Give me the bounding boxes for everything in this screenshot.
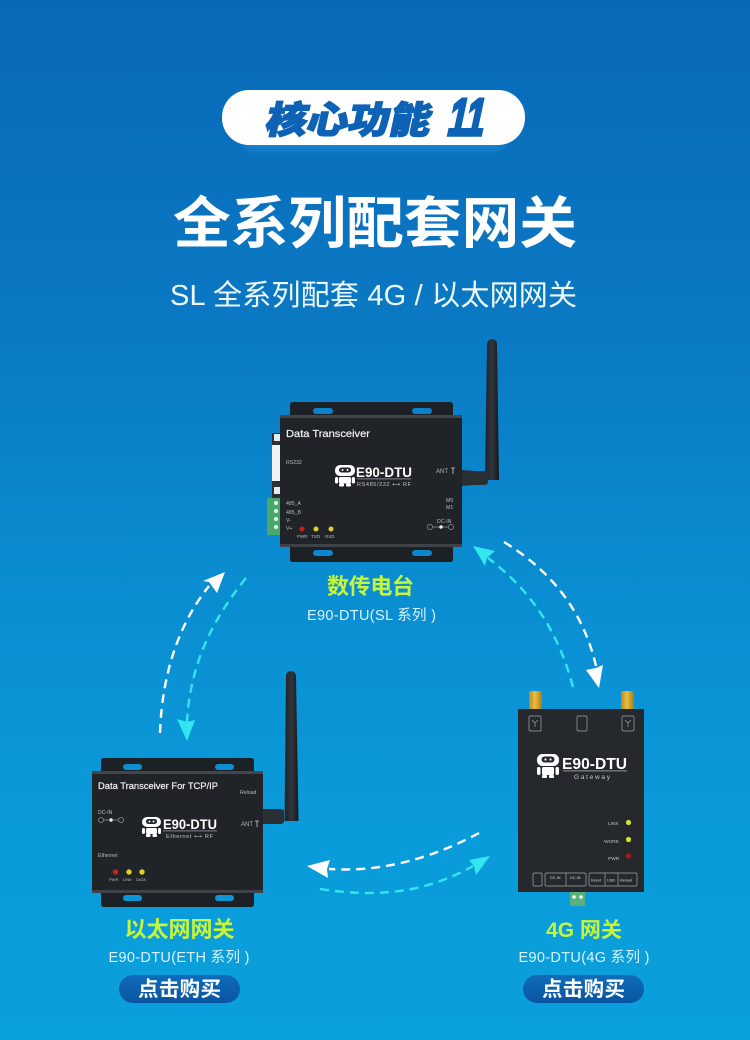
device: 4G gateway: DC-IN bbox=[550, 876, 561, 880]
body bbox=[518, 709, 644, 892]
device: ethernet gateway bbox=[92, 671, 298, 907]
model label: E90-DTU bbox=[356, 464, 412, 480]
antenna connectors bbox=[529, 691, 634, 710]
port labels: PWR bbox=[297, 534, 308, 539]
antenna symbol bbox=[255, 821, 259, 827]
icon: robot bbox=[335, 465, 355, 486]
port icons top bbox=[529, 716, 634, 731]
status labels and LEDs: LINK bbox=[608, 821, 619, 827]
DC jack symbol bbox=[427, 524, 454, 530]
badge: core function 11: 11 bbox=[443, 89, 492, 147]
title: 全系列配套网关 bbox=[173, 192, 577, 255]
port labels: Reload bbox=[240, 790, 257, 796]
port labels: DATA bbox=[136, 877, 146, 882]
port labels: Ethernet bbox=[98, 853, 118, 859]
button: buy 4G bbox=[523, 975, 644, 1003]
device: data transceiver SL bbox=[267, 339, 499, 562]
device label: 4G gateway bbox=[518, 919, 650, 966]
port labels: V+ bbox=[286, 526, 292, 532]
device label: 4G gateway: E90-DTU(4G 系列 ) bbox=[518, 949, 650, 966]
antenna symbol bbox=[451, 468, 455, 474]
device label: ethernet gateway: 以太网网关 bbox=[124, 917, 234, 942]
port labels: LINK bbox=[123, 877, 132, 882]
heading on device: Data Transceiver bbox=[286, 429, 371, 440]
flanges bbox=[101, 758, 254, 771]
device: 4G gateway: Reload bbox=[620, 878, 632, 882]
device: ethernet gateway: Ethernet ⟷ RF bbox=[166, 834, 214, 840]
device label: ethernet gateway: E90-DTU(ETH 系列 ) bbox=[108, 949, 250, 966]
device label: radio: E90-DTU(SL 系列 ) bbox=[307, 607, 436, 624]
badge: core function 11: 核心功能 bbox=[262, 99, 436, 141]
arrows: right pair bbox=[473, 542, 603, 688]
port labels: ANT bbox=[241, 822, 253, 828]
LEDs bbox=[300, 526, 304, 532]
device: 4G gateway: USB bbox=[607, 878, 615, 882]
heading on device: Data Transceiver For TCP/IP bbox=[98, 781, 218, 792]
icon: robot bbox=[537, 754, 559, 778]
port labels bbox=[286, 460, 453, 539]
device: 4G gateway: Reset bbox=[591, 878, 602, 882]
port labels: RXD bbox=[325, 534, 335, 539]
arrows: bottom pair bbox=[307, 833, 490, 893]
status labels and LEDs bbox=[604, 820, 631, 862]
port labels: DC-IN bbox=[437, 519, 452, 525]
device: 4G gateway bbox=[518, 691, 644, 906]
port labels bbox=[98, 790, 257, 882]
port labels: M0 bbox=[446, 498, 453, 504]
model label: E90-DTU bbox=[562, 756, 627, 773]
serial port and terminal block bbox=[267, 433, 281, 535]
bottom ports bbox=[533, 873, 637, 886]
flanges bbox=[290, 402, 453, 415]
port labels: TXD bbox=[311, 534, 321, 539]
device label: ethernet gateway bbox=[108, 917, 250, 966]
antenna: ethernet bbox=[263, 671, 298, 824]
badge: core function 11 bbox=[222, 89, 525, 147]
status labels and LEDs: WORK bbox=[604, 839, 620, 845]
port labels: DC-IN bbox=[98, 810, 113, 816]
port labels: PWR bbox=[109, 877, 118, 882]
terminal block bbox=[570, 892, 585, 906]
body bbox=[280, 415, 462, 547]
device: 4G gateway: Gateway bbox=[574, 774, 611, 781]
port labels: ANT bbox=[436, 469, 448, 475]
subtitle: SL 全系列配套 4G / 以太网网关 bbox=[170, 279, 577, 312]
device: 4G gateway: DC-IN bbox=[570, 876, 581, 880]
port labels: 485_A bbox=[286, 501, 302, 507]
device label: 4G gateway: 4G 网关 bbox=[546, 919, 622, 942]
button: buy ethernet bbox=[119, 975, 240, 1003]
icon: robot bbox=[142, 817, 161, 837]
port labels: RS232 bbox=[286, 460, 302, 466]
port labels: V- bbox=[286, 518, 291, 524]
DC jack symbol bbox=[98, 818, 124, 822]
arrows: left pair bbox=[160, 572, 246, 741]
model label: E90-DTU bbox=[163, 816, 217, 832]
button: buy ethernet: 点击购买 bbox=[138, 978, 221, 1001]
port labels: M1 bbox=[446, 505, 453, 511]
body bbox=[92, 771, 263, 893]
device: data transceiver SL: RS485/232 ⟷ RF bbox=[357, 482, 412, 488]
status labels and LEDs: PWR bbox=[608, 856, 620, 862]
antenna: SL bbox=[462, 339, 499, 486]
button: buy 4G: 点击购买 bbox=[542, 978, 625, 1001]
device label: radio: 数传电台 bbox=[327, 574, 414, 599]
port labels: 485_B bbox=[286, 510, 302, 516]
device label: radio bbox=[307, 574, 436, 624]
LEDs bbox=[113, 869, 118, 875]
